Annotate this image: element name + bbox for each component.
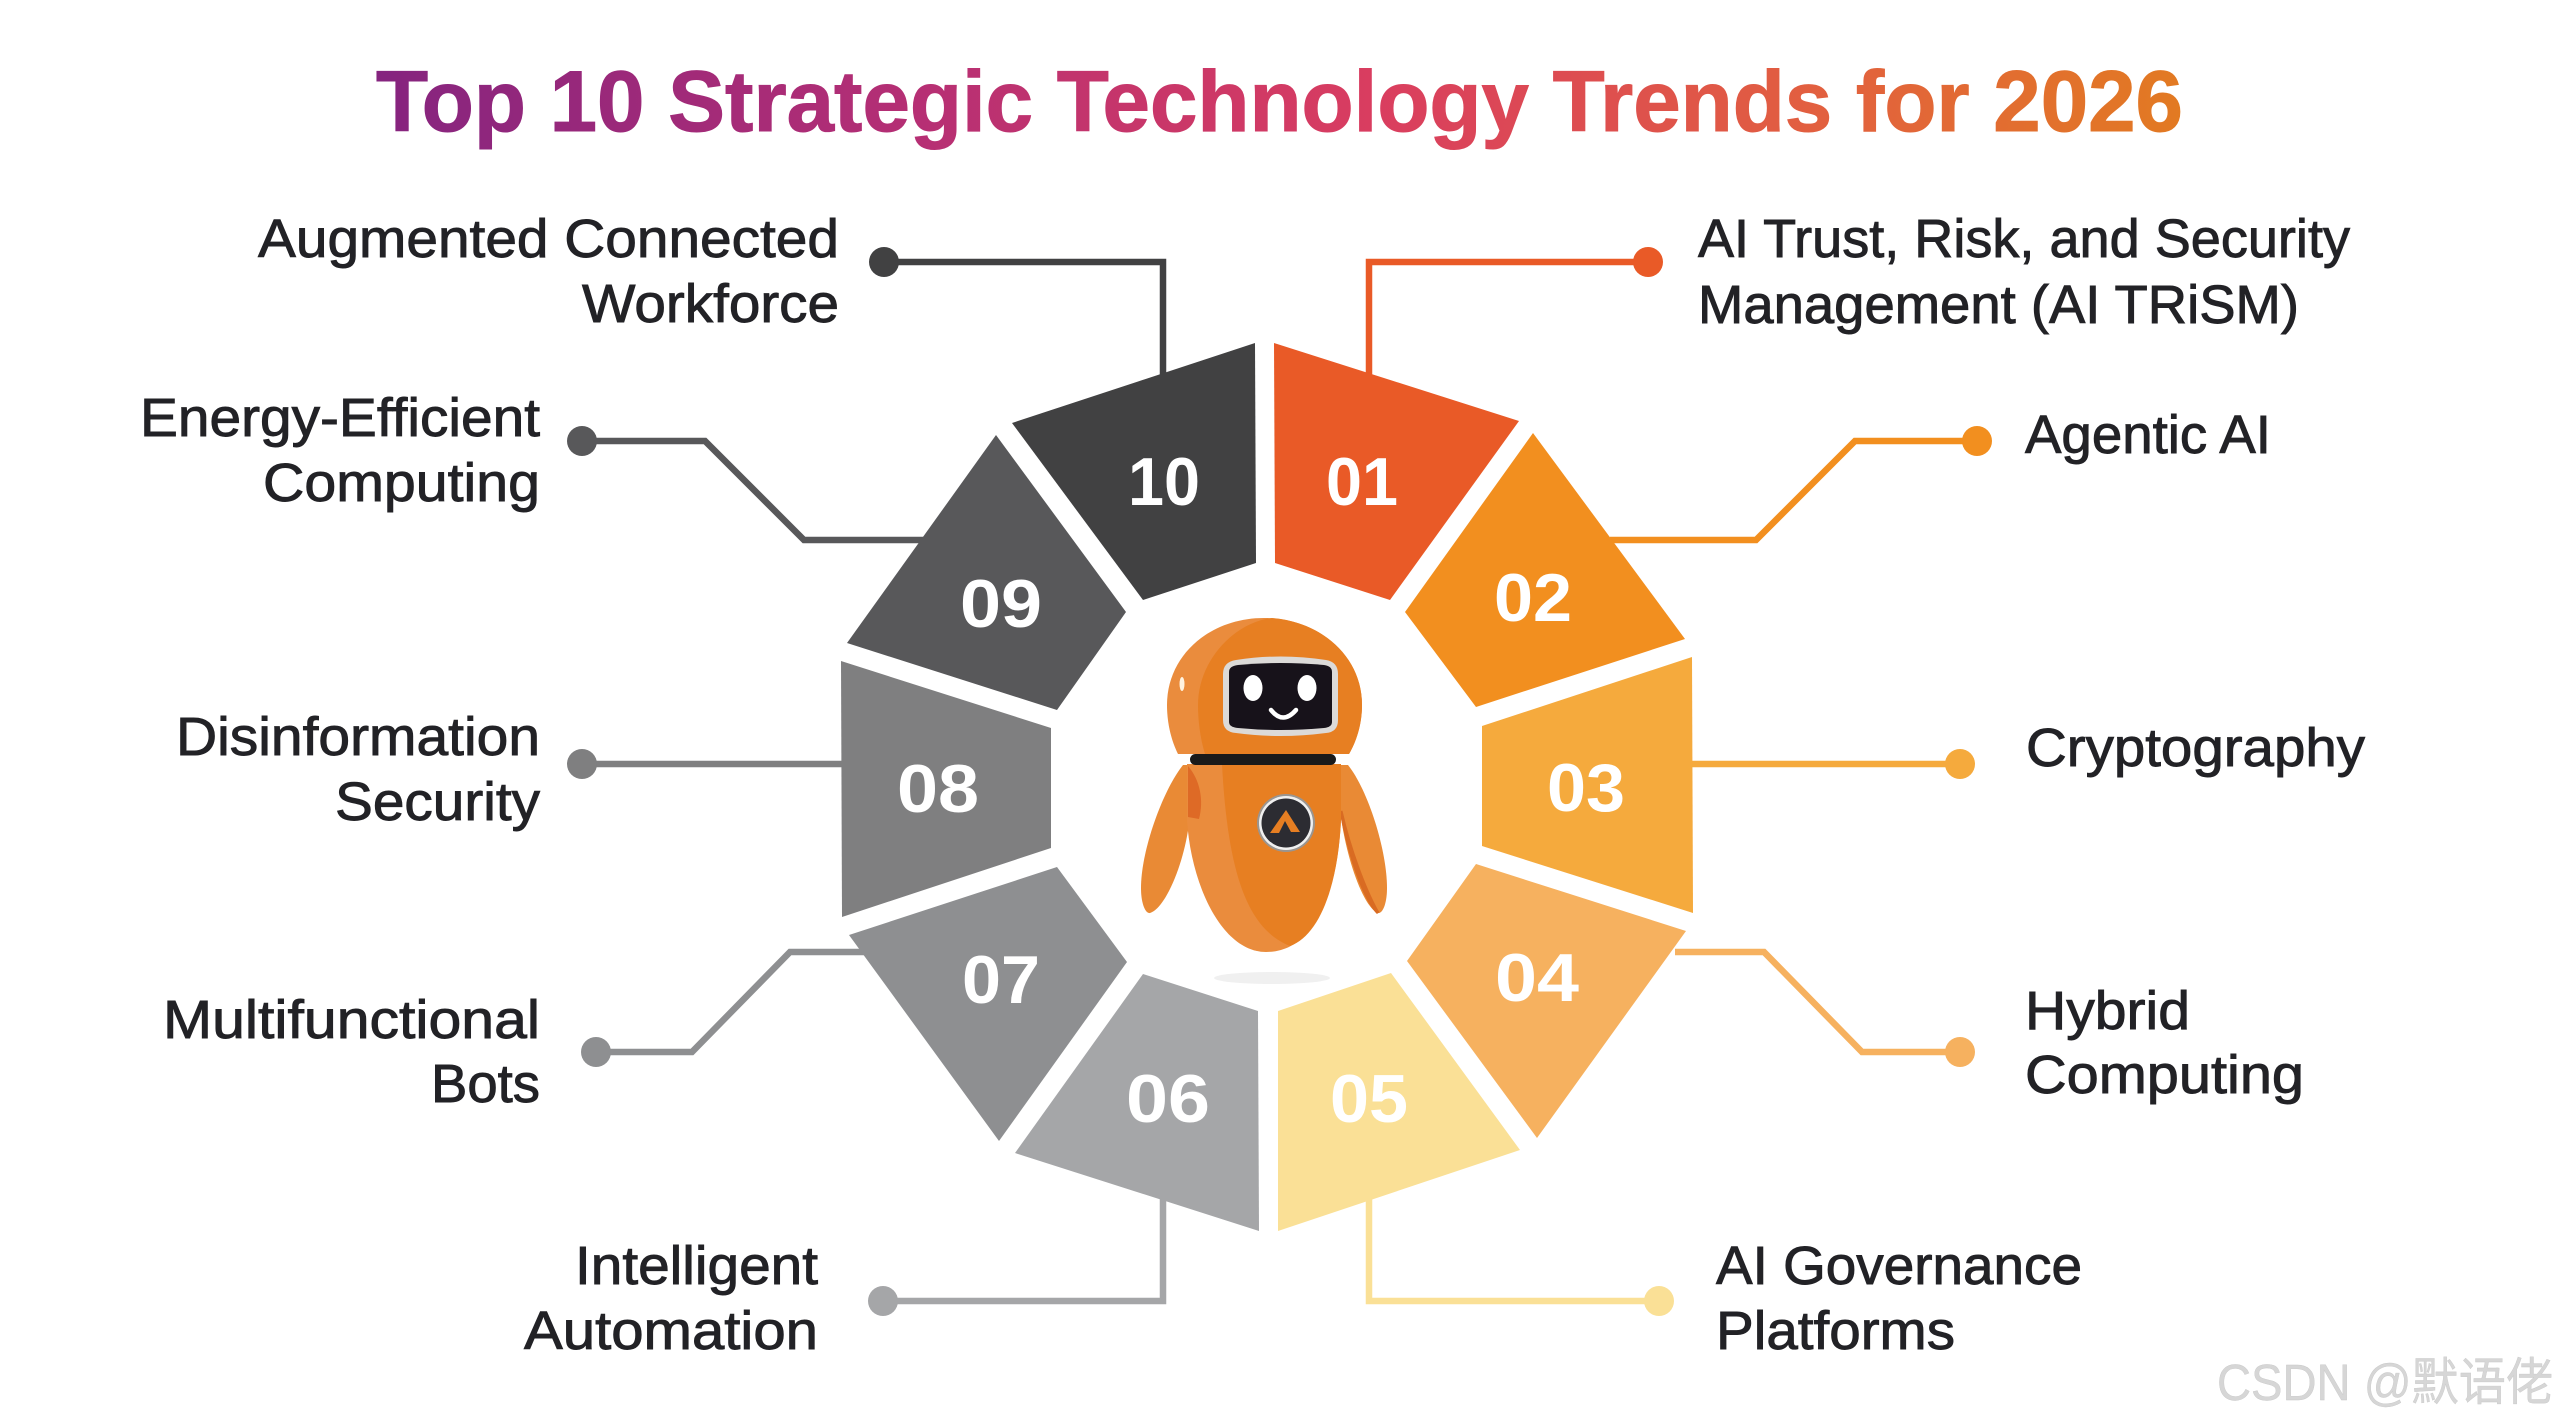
segment 06 bbox=[1015, 974, 1259, 1231]
connector 09 bbox=[582, 441, 930, 540]
collar bbox=[1190, 754, 1336, 765]
right eye bbox=[1298, 675, 1316, 701]
trend 06: Intelligent Automation bbox=[524, 974, 1259, 1361]
trend 03: Cryptography bbox=[1482, 657, 2365, 913]
title: Top 10 Strategic Technology Trends for 2026 bbox=[376, 54, 2183, 150]
dot 08 bbox=[567, 749, 597, 779]
number 01: 01 bbox=[1326, 444, 1398, 520]
label 10: Workforce bbox=[582, 274, 839, 334]
number 03: 03 bbox=[1547, 750, 1625, 826]
dot 05 bbox=[1644, 1286, 1674, 1316]
left eye bbox=[1244, 675, 1262, 701]
dot 01 bbox=[1633, 247, 1663, 277]
smile bbox=[1271, 710, 1296, 718]
segment 01 bbox=[1274, 343, 1519, 600]
trend 08: Disinformation Security bbox=[176, 661, 1051, 917]
label 09: Computing bbox=[263, 453, 540, 513]
dot 09 bbox=[567, 426, 597, 456]
connector 07 bbox=[596, 952, 870, 1052]
trend 02: Agentic AI bbox=[1405, 405, 2271, 707]
trend 04: Hybrid Computing bbox=[1407, 864, 2304, 1138]
segment 08 bbox=[841, 661, 1051, 917]
connector 05 bbox=[1369, 1195, 1659, 1301]
label 04: Hybrid bbox=[2025, 981, 2190, 1041]
label 03: Cryptography bbox=[2026, 718, 2365, 778]
segment 03 bbox=[1482, 657, 1693, 913]
trend 09: Energy-Efficient Computing bbox=[140, 388, 1126, 710]
chest badge bbox=[1257, 794, 1315, 852]
head main tone bbox=[1198, 618, 1362, 754]
label 06: Intelligent bbox=[575, 1236, 818, 1296]
number 10: 10 bbox=[1128, 444, 1200, 520]
connector 04 bbox=[1675, 952, 1960, 1052]
connector 01 bbox=[1369, 262, 1648, 380]
label 08: Disinformation bbox=[176, 707, 540, 767]
number 04: 04 bbox=[1495, 940, 1579, 1016]
label 10: Augmented Connected bbox=[258, 209, 839, 269]
segment 10 bbox=[1012, 343, 1256, 600]
label 02: Agentic AI bbox=[2025, 405, 2271, 465]
dot 02 bbox=[1962, 426, 1992, 456]
dot 07 bbox=[581, 1037, 611, 1067]
robot mascot bbox=[1141, 618, 1387, 984]
segment 07 bbox=[849, 867, 1127, 1141]
right arm bbox=[1338, 765, 1387, 913]
screen bbox=[1229, 663, 1332, 730]
label 07: Multifunctional bbox=[163, 990, 540, 1050]
trend 07: Multifunctional Bots bbox=[163, 867, 1127, 1141]
body main tone bbox=[1222, 764, 1341, 946]
left arm bbox=[1141, 765, 1192, 913]
head bbox=[1167, 618, 1362, 754]
label 01: Management (AI TRiSM) bbox=[1698, 275, 2299, 335]
body bbox=[1187, 764, 1341, 952]
number 07: 07 bbox=[962, 942, 1040, 1018]
robot shadow bbox=[1214, 972, 1330, 984]
segment 09 bbox=[847, 435, 1126, 710]
trend 05: AI Governance Platforms bbox=[1278, 973, 2082, 1361]
connector 03 bbox=[1690, 761, 1960, 767]
segment 02 bbox=[1405, 433, 1685, 707]
right arm shade bbox=[1341, 811, 1378, 913]
number 05: 05 bbox=[1330, 1061, 1408, 1137]
number 02: 02 bbox=[1494, 560, 1572, 636]
number 09: 09 bbox=[960, 566, 1042, 642]
left arm shade bbox=[1188, 766, 1201, 819]
label 06: Automation bbox=[524, 1301, 818, 1361]
segment 05 bbox=[1278, 973, 1520, 1231]
number 08: 08 bbox=[897, 751, 979, 827]
dot 04 bbox=[1945, 1037, 1975, 1067]
connector 10 bbox=[884, 262, 1163, 380]
head highlight bbox=[1180, 677, 1184, 691]
dot 03 bbox=[1945, 749, 1975, 779]
screen bezel bbox=[1223, 656, 1338, 736]
label 05: Platforms bbox=[1716, 1301, 1955, 1361]
label 01: AI Trust, Risk, and Security bbox=[1698, 209, 2350, 269]
label 05: AI Governance bbox=[1716, 1236, 2082, 1296]
connector 06 bbox=[883, 1195, 1163, 1301]
dot 10 bbox=[869, 247, 899, 277]
connector 02 bbox=[1610, 441, 1977, 540]
trend 01: AI TRiSM bbox=[1274, 209, 2350, 600]
dot 06 bbox=[868, 1286, 898, 1316]
segment 04 bbox=[1407, 864, 1686, 1138]
label 08: Security bbox=[335, 772, 540, 832]
label 09: Energy-Efficient bbox=[140, 388, 540, 448]
number 06: 06 bbox=[1126, 1061, 1210, 1137]
label 04: Computing bbox=[2025, 1045, 2304, 1105]
trend 10: Augmented Connected Workforce bbox=[258, 209, 1256, 600]
connector 08 bbox=[582, 761, 845, 767]
label 07: Bots bbox=[431, 1054, 540, 1114]
